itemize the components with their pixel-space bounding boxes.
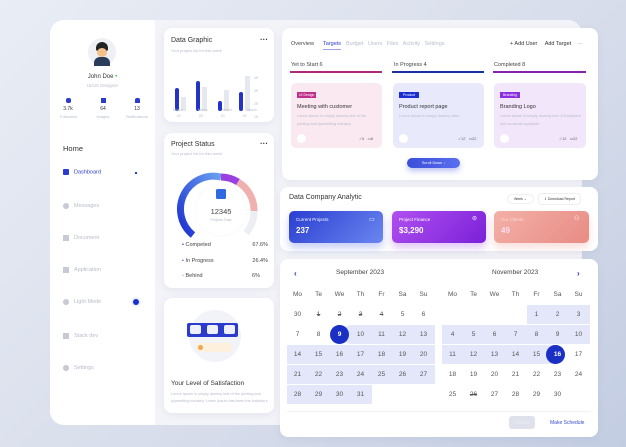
nov grid: 5 [472, 331, 475, 338]
panel: calendar [280, 259, 598, 437]
nov grid: 15 [533, 351, 540, 358]
panel: calendar: November 2023 [492, 269, 538, 276]
nov grid [448, 291, 582, 398]
sep grid: 23 [336, 371, 343, 378]
panel: targets [282, 28, 598, 180]
stats: Notifications [126, 114, 148, 119]
sep grid: 10 [357, 331, 364, 338]
stats: 13 [134, 106, 140, 112]
nov grid: Su [575, 291, 582, 298]
nov grid: 9 [556, 331, 559, 338]
panel: data graphic: ··· [260, 35, 268, 44]
stat: current projects: Current Projects [296, 217, 329, 222]
nov grid: 4 [451, 331, 454, 338]
tabs: Overview [291, 41, 314, 47]
sep grid: 4 [380, 311, 383, 318]
panel: data company analytic [280, 187, 598, 251]
stat: current projects [289, 211, 383, 243]
sep grid: 5 [401, 311, 404, 318]
sep grid: 29 [315, 391, 322, 398]
nov grid: Fr [533, 291, 540, 298]
stats: 3.7k [63, 106, 73, 112]
panel: targets: Targets [323, 41, 341, 47]
card: product: Product [403, 93, 415, 97]
panel: calendar: ‹ [294, 269, 297, 278]
sep grid: 17 [357, 351, 364, 358]
card: branding: Lorem Ipsum is simply dummy text of Excepteur sint occaecat cupidatat [500, 114, 581, 126]
donut gauge: 12345 [211, 207, 231, 216]
stats [60, 98, 148, 119]
column headers: Yet to Start 6 [291, 62, 323, 68]
nov grid: 11 [449, 351, 456, 358]
card: meeting: ✓6 ▭8 [359, 137, 373, 141]
legend: • Competed [182, 242, 211, 248]
nav items: Document [74, 235, 99, 241]
nov grid: 30 [554, 391, 561, 398]
nov grid: Sa [554, 291, 561, 298]
sep grid: 31 [357, 391, 364, 398]
card: meeting [291, 83, 382, 148]
home heading: Home [63, 144, 83, 153]
card: product: Lorem Ipsum is simply dummy data [399, 114, 459, 118]
card: product [393, 83, 484, 148]
nav items: Settings [74, 365, 94, 371]
bar chart [175, 76, 258, 119]
nav items [63, 203, 141, 371]
sep grid: 9 [338, 331, 341, 338]
scroll button [407, 158, 460, 168]
sep grid: 25 [378, 371, 385, 378]
sep grid: Te [315, 291, 322, 298]
stat: clients: 49 [501, 226, 510, 235]
legend: 67.6% [252, 242, 268, 248]
sep grid: 30 [336, 391, 343, 398]
panel: targets: In Progress 4 [394, 62, 427, 68]
selected days [330, 325, 349, 344]
sep grid: 7 [296, 331, 299, 338]
sep grid: 3 [359, 311, 362, 318]
stats: 64 [100, 106, 106, 112]
sidebar [50, 20, 155, 425]
panel: targets: Completed 8 [494, 62, 525, 68]
card: product: ✓12 ▭22 [458, 137, 476, 141]
sep grid: 30 [294, 311, 301, 318]
nov grid: Th [512, 291, 519, 298]
sep grid: 21 [294, 371, 301, 378]
nov grid: 7 [514, 331, 517, 338]
nov grid: 17 [575, 351, 582, 358]
stats: Images [96, 114, 110, 119]
sep grid: 18 [378, 351, 385, 358]
sep grid: 15 [315, 351, 322, 358]
card: product: Product report page [399, 104, 448, 110]
legend: • Behind [182, 273, 203, 279]
nov grid: 12 [470, 351, 477, 358]
sep grid: 19 [399, 351, 406, 358]
nov grid: 3 [577, 311, 580, 318]
nav items: Stack dev [74, 333, 98, 339]
nov grid: We [490, 291, 499, 298]
panel: data company analytic: ⇩ Download Report [544, 197, 575, 201]
legend [182, 242, 268, 279]
nav dashboard: Dashboard [74, 169, 101, 175]
nov grid: 20 [491, 371, 498, 378]
nov grid: 24 [575, 371, 582, 378]
sep grid: 8 [317, 331, 320, 338]
nov grid: 10 [575, 331, 582, 338]
sep grid: Mo [293, 291, 302, 298]
card: branding [494, 83, 586, 148]
sep grid: 2 [338, 311, 341, 318]
main container [50, 20, 582, 425]
card: meeting: Meeting with customer [297, 104, 352, 110]
stat: finance: ⊜ [472, 216, 477, 222]
sep grid: Th [357, 291, 364, 298]
stat: current projects: 237 [296, 226, 309, 235]
nov grid: 1 [535, 311, 538, 318]
bar chart: 4K [254, 76, 258, 80]
legend: 6% [252, 273, 260, 279]
panel: satisfaction [164, 298, 274, 413]
panel: project status [164, 133, 274, 288]
sep grid: We [335, 291, 344, 298]
sep grid: 14 [294, 351, 301, 358]
nov grid: 6 [493, 331, 496, 338]
panel: calendar: › [577, 269, 580, 278]
nav items: Messages [74, 203, 99, 209]
nov grid: 27 [491, 391, 498, 398]
panel: data graphic: 01 03 10 19 [177, 114, 246, 118]
bar chart: 2K [254, 102, 258, 106]
cancel button: Cancel [515, 420, 529, 425]
sep grid: Fr [378, 291, 385, 298]
nov grid: 2 [556, 311, 559, 318]
sep grid: 24 [357, 371, 364, 378]
role: UI/UX Designer [87, 83, 118, 88]
stat: clients: Our Clients [501, 217, 524, 222]
nov grid: 8 [535, 331, 538, 338]
sep grid: 27 [420, 371, 427, 378]
panel: project status: ··· [260, 139, 268, 148]
nov grid: 22 [533, 371, 540, 378]
illustration [189, 310, 241, 362]
nov grid: Te [470, 291, 477, 298]
nov grid: 16 [554, 351, 561, 358]
nav items: Light Mode [74, 299, 101, 305]
stat: clients: ⚇ [574, 216, 579, 222]
panel: targets: + Add User Add Target — [510, 41, 583, 47]
stats: Followers [60, 114, 77, 119]
bar chart: 3K [254, 89, 258, 93]
nav items: Application [74, 267, 101, 273]
panel: calendar: September 2023 [336, 269, 384, 276]
nov grid: 23 [554, 371, 561, 378]
nov grid: 28 [512, 391, 519, 398]
stat: finance [392, 211, 486, 243]
panel: data company analytic: Data Company Analytic [289, 194, 362, 201]
panel: data graphic: Data Graphic [171, 37, 212, 44]
legend: 26.4% [252, 258, 268, 264]
name: John Doe • [88, 74, 117, 80]
panel: data company analytic: Week ⌄ [514, 197, 527, 201]
sep grid: 6 [422, 311, 425, 318]
scroll button: Scroll Down ↓ [422, 161, 445, 165]
sep grid: 1 [317, 311, 320, 318]
panel: data graphic [164, 28, 274, 122]
bands [342, 325, 435, 344]
nov grid: 21 [512, 371, 519, 378]
panel: project status: Your project list for this week [171, 151, 222, 156]
card: branding: ✓12 ▭22 [559, 137, 577, 141]
sep grid: 26 [399, 371, 406, 378]
panel: data graphic: March March March March [173, 108, 257, 112]
panel: data graphic: 1K [254, 115, 258, 119]
satisfaction text: Lorem Ipsum is simply dummy text of the printing and typesetting industry. Lorem Ipsum has been the industry's [171, 392, 268, 403]
stat: clients [494, 211, 589, 243]
cancel button [509, 416, 535, 429]
sep grid: 12 [399, 331, 406, 338]
sep grid: Sa [399, 291, 406, 298]
sep grid: 20 [420, 351, 427, 358]
donut gauge: Projects Data [210, 218, 232, 222]
stat: finance: Project Finance [399, 217, 430, 222]
sep grid: 16 [336, 351, 343, 358]
nav dashboard [63, 169, 137, 175]
stat: current projects: ▭ [369, 217, 375, 223]
sep grid: 28 [294, 391, 301, 398]
sep grid: 11 [378, 331, 385, 338]
card: meeting: Lorem Ipsum is simply dummy text of the printing and typesetting industry. [297, 114, 366, 126]
sep grid: 22 [315, 371, 322, 378]
stat: finance: $3,290 [399, 226, 423, 235]
make schedule: Make Schedule [550, 420, 584, 426]
nov grid: 29 [533, 391, 540, 398]
legend: • In Progress [182, 258, 214, 264]
sep grid: 13 [420, 331, 427, 338]
nov grid: Mo [448, 291, 457, 298]
nov grid: 18 [449, 371, 456, 378]
card: branding: Branding Logo [500, 104, 536, 110]
nov grid: 19 [470, 371, 477, 378]
card: meeting: UI Design [299, 93, 314, 97]
sep grid [293, 291, 428, 398]
avatar [88, 38, 116, 66]
nov grid: 25 [449, 391, 456, 398]
donut gauge [176, 172, 258, 238]
panel: data graphic: Your project list for this week [171, 48, 222, 53]
panel: targets: Budget Users Files Activity Settings [346, 41, 445, 47]
nov grid: 13 [491, 351, 498, 358]
nov grid: 14 [512, 351, 519, 358]
satisfaction title: Your Level of Satisfaction [171, 380, 244, 387]
card: branding: Branding [503, 93, 517, 97]
sep grid: Su [420, 291, 427, 298]
panel: project status: Project Status [171, 141, 215, 148]
nov grid: 26 [470, 391, 477, 398]
